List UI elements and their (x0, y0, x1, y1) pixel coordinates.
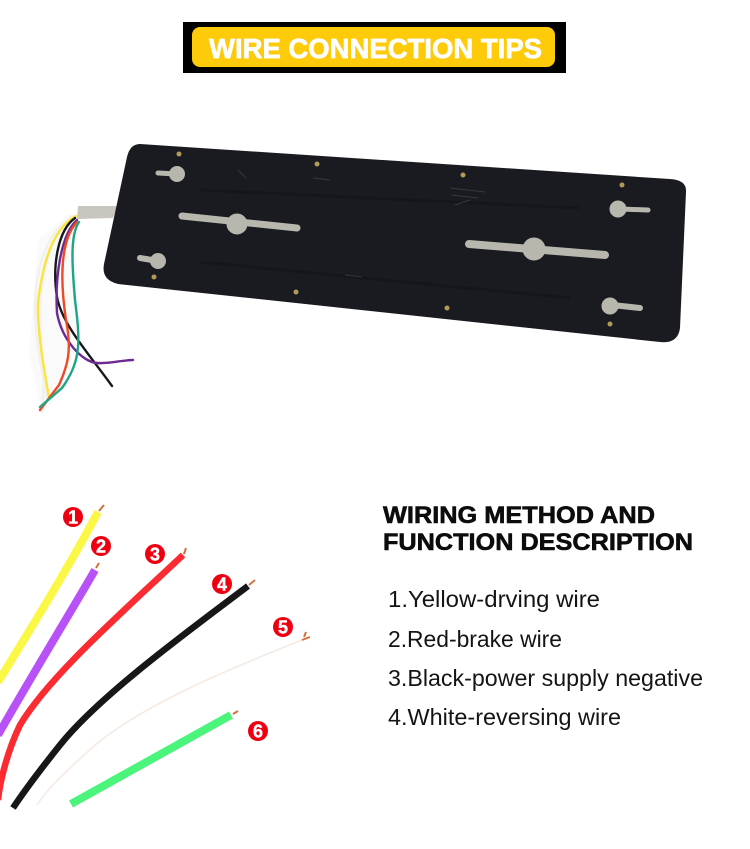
brass rivets (152, 152, 624, 326)
badge 6: 6 (253, 722, 263, 742)
translucent wire sleeve (29, 214, 78, 412)
wire function list: 1.Yellow-drving wire (388, 586, 600, 612)
numbered wire diagram (0, 505, 310, 808)
purple wire (57, 220, 133, 363)
green wire (40, 222, 79, 407)
badge 6 (248, 721, 268, 742)
number badges (63, 507, 293, 742)
black wire (55, 218, 112, 386)
wire function list: 3.Black-power supply negative (388, 665, 703, 691)
badge 4: 4 (217, 574, 227, 594)
badge 3 (145, 544, 165, 564)
yellow wire (38, 216, 76, 397)
mounting slots (140, 166, 648, 314)
badge 2 (91, 536, 111, 556)
pressed ridges (200, 190, 580, 298)
wire 3 red (0, 555, 183, 800)
product photo: wire bundle (29, 214, 133, 412)
wire 6 green (71, 715, 231, 804)
bottom-right keyhole (602, 298, 640, 314)
red wire (40, 222, 77, 410)
badge 5 (273, 617, 293, 638)
wire sleeve tube (77, 206, 118, 219)
left long slot (182, 214, 297, 234)
section heading (383, 502, 693, 556)
wire function list (388, 586, 703, 730)
badge 4 (212, 574, 232, 594)
wire 2 purple (0, 570, 95, 735)
top-right keyhole (610, 201, 648, 217)
wire 4 black (13, 586, 248, 808)
badge 1 (63, 507, 83, 528)
title banner (183, 22, 566, 73)
wire function list: 4.White-reversing wire (388, 704, 621, 730)
badge 5: 5 (278, 618, 288, 638)
white wires (35, 216, 74, 412)
copper wire tips (96, 505, 310, 714)
wire 1 yellow (0, 512, 98, 682)
product photo: black mounting plate (104, 144, 686, 342)
top-left keyhole (158, 166, 184, 182)
badge 1: 1 (68, 508, 78, 528)
surface scratches (238, 170, 485, 277)
section heading: FUNCTION DESCRIPTION (383, 529, 693, 556)
title banner: WIRE CONNECTION TIPS (209, 33, 542, 64)
wire function list: 2.Red-brake wire (388, 626, 562, 652)
badge 2: 2 (96, 536, 106, 556)
right long slot (469, 238, 605, 260)
bottom-left keyhole (140, 254, 166, 268)
wire 5 white (37, 640, 302, 805)
badge 3: 3 (150, 544, 160, 564)
section heading: WIRING METHOD AND (383, 502, 655, 529)
